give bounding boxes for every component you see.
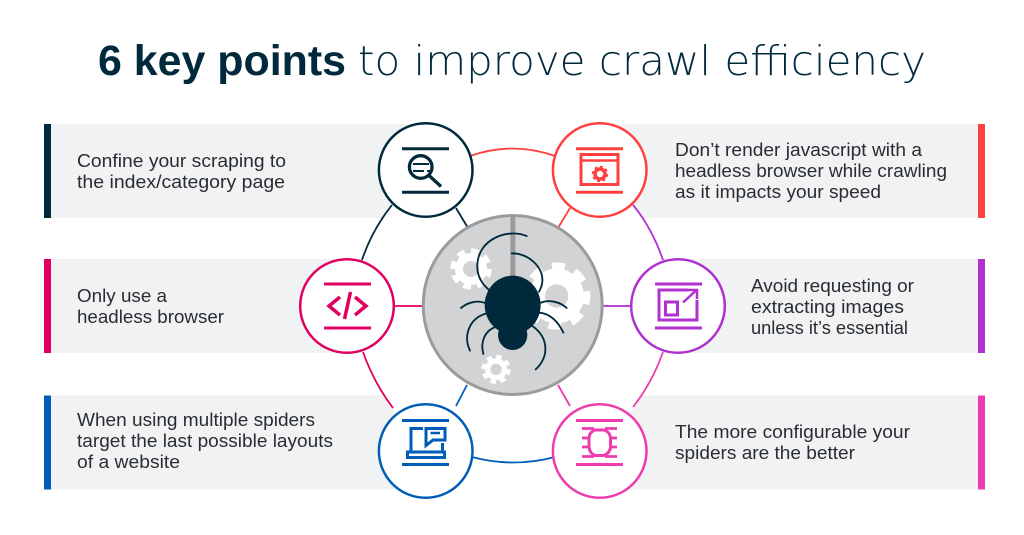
panel: multiple spiders: target the last possible layouts	[77, 430, 333, 451]
panel: configurable spiders	[617, 396, 985, 490]
node: code icon	[300, 259, 394, 353]
panel: configurable spiders: The more configurable your	[675, 421, 910, 442]
panel: confine scraping: the index/category page	[77, 171, 285, 192]
panel: avoid images: unless it’s essential	[751, 317, 908, 338]
panel: headless browser: headless browser	[77, 306, 224, 327]
gear: upper left	[453, 251, 489, 287]
panel: multiple spiders: When using multiple spiders	[77, 409, 315, 430]
panel: confine scraping	[44, 124, 410, 218]
panel: javascript rendering	[617, 124, 985, 218]
gear: lower	[483, 357, 509, 382]
node: browser gear icon	[553, 123, 646, 217]
node: bug icon	[553, 404, 646, 498]
panel: javascript rendering: Don’t render javascript with a	[675, 139, 923, 160]
spider thread	[510, 215, 515, 282]
connectors between nodes and hub	[362, 148, 663, 462]
central hub: spider with gears	[423, 215, 602, 394]
title	[98, 37, 926, 85]
panel: multiple spiders: of a website	[77, 451, 180, 472]
panel: headless browser: Only use a	[77, 285, 168, 306]
gear: large	[527, 266, 587, 326]
panel: avoid images	[663, 259, 985, 353]
panel: javascript rendering: as it impacts your speed	[675, 181, 881, 202]
node: image resize icon	[631, 259, 725, 353]
title: to improve crawl efficiency	[358, 37, 926, 85]
node: laptop chat icon	[379, 404, 473, 498]
panel: headless browser	[44, 259, 362, 353]
panel: avoid images: Avoid requesting or	[751, 275, 914, 296]
title: 6 key points	[98, 37, 346, 85]
node: search icon	[379, 123, 473, 217]
panel: javascript rendering: headless browser while crawling	[675, 160, 947, 181]
spider body	[485, 276, 541, 350]
spider legs	[461, 233, 567, 369]
panel: configurable spiders: spiders are the better	[675, 442, 855, 463]
panel: multiple spiders	[44, 396, 394, 490]
panel: confine scraping: Confine your scraping to	[77, 150, 286, 171]
panel: avoid images: extracting images	[751, 296, 904, 317]
